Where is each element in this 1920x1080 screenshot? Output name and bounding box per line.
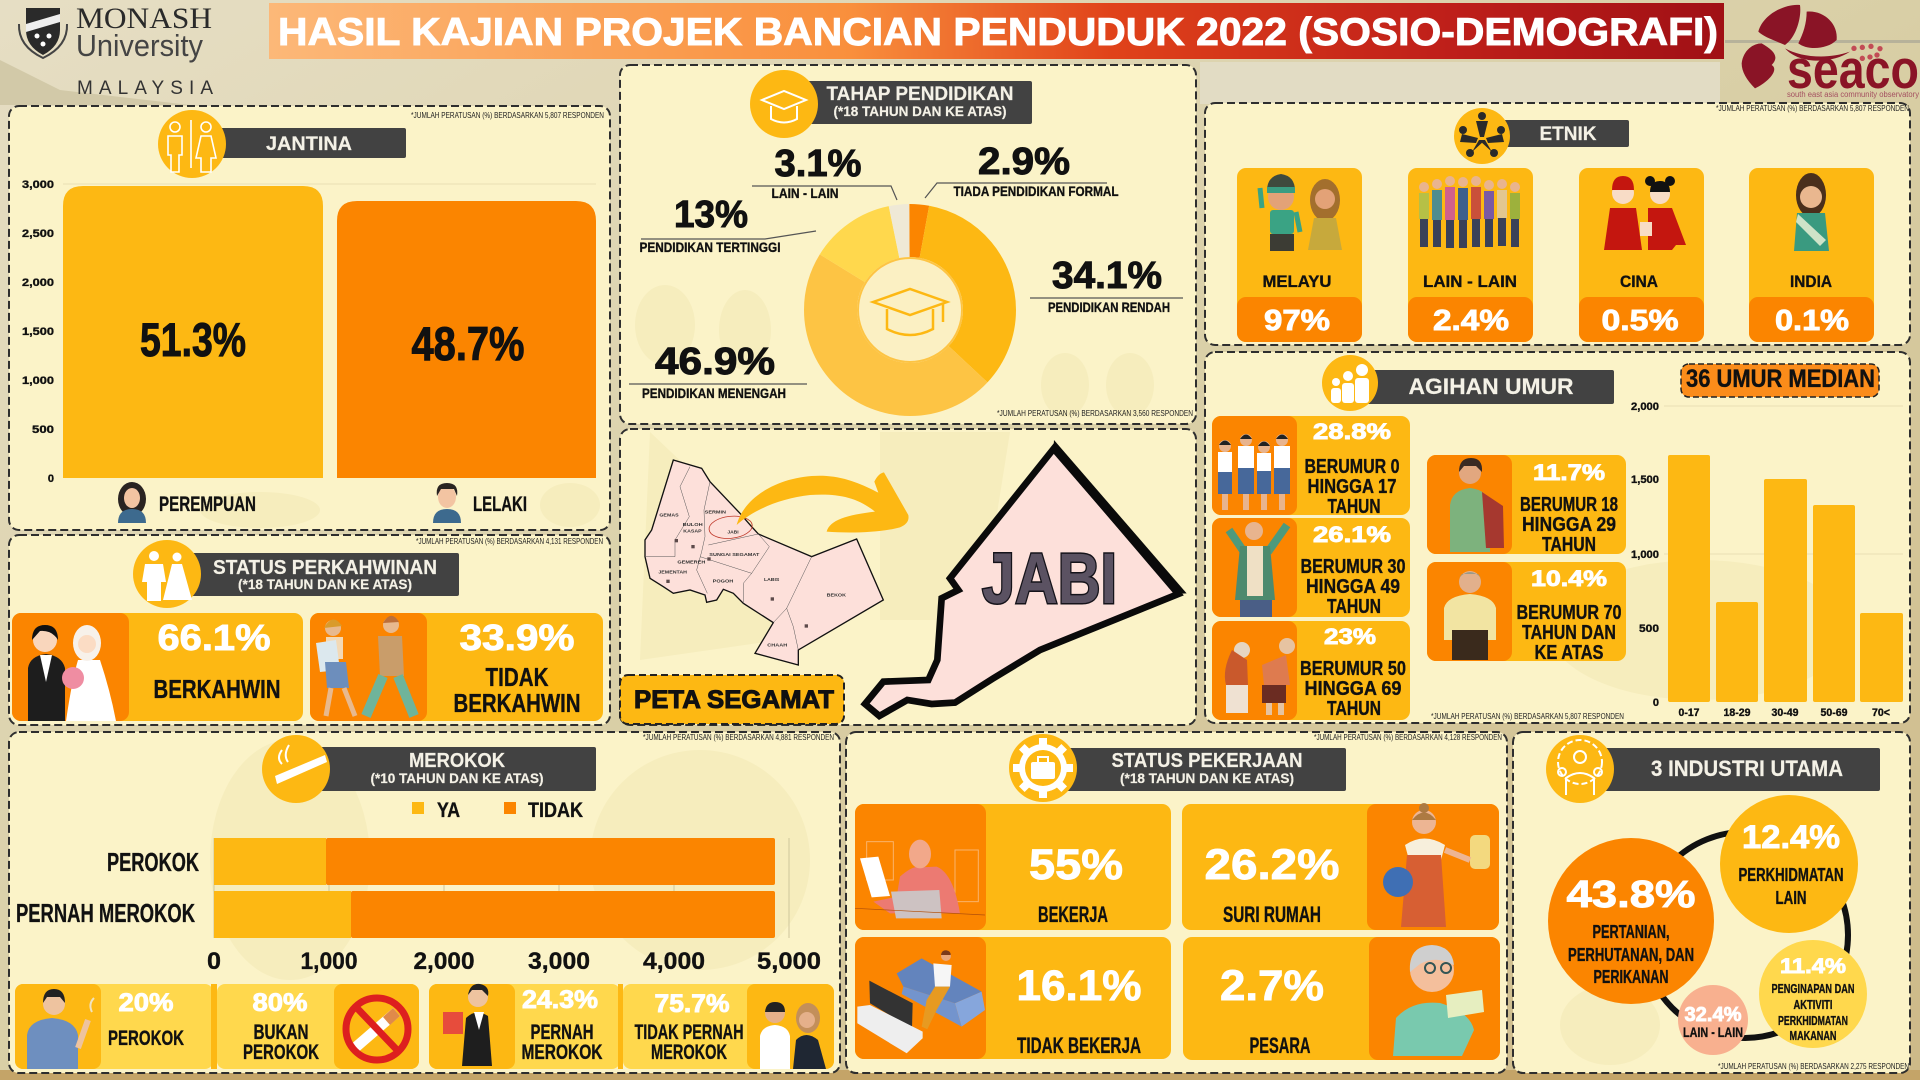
heading: agihan umur [1322, 355, 1614, 411]
cycle ring [1642, 832, 1848, 1038]
card: melayu [1237, 168, 1362, 342]
card: umur 30-49 [1212, 518, 1410, 618]
heading: tahap pendidikan: TAHAP PENDIDIKAN [826, 84, 1014, 105]
heading: etnik [1454, 108, 1629, 164]
legend: lelaki [433, 483, 527, 523]
text: 33.9% tidak berkahwin [454, 617, 580, 718]
card: perokok 20%: PEROKOK [108, 1027, 184, 1050]
callout: 46.9% pendidikan menengah: 46.9% [655, 341, 775, 383]
legend: merokok: YA [437, 799, 460, 822]
card: pernah merokok 24.3% [429, 984, 623, 1069]
card: umur 0-17: BERUMUR 0 [1304, 456, 1400, 478]
text: 66.1% berkahwin [154, 617, 280, 704]
bar chart: jantina: 2,500 [22, 228, 54, 240]
map: daerah segamat: LABIS [764, 577, 780, 583]
card: berkahwin [12, 613, 303, 721]
card: umur 30-49: HINGGA 49 [1306, 576, 1400, 598]
bar chart: merokok: 5,000 [757, 948, 821, 975]
heading: merokok: (*10 TAHUN DAN KE ATAS) [370, 770, 544, 786]
card: melayu: MELAYU [1262, 272, 1332, 291]
map: daerah segamat: POGOH [713, 578, 734, 584]
map: daerah segamat: KASAP [683, 528, 702, 534]
bar chart: merokok: 1,000 [300, 948, 358, 975]
bubble: 32.4% lain-lain [1678, 985, 1748, 1055]
bubble: 32.4% lain-lain: 32.4% [1684, 1004, 1742, 1026]
text: 66.1% berkahwin: BERKAHWIN [154, 674, 280, 704]
arrow: ke jabi [737, 472, 909, 532]
bubble: 11.4% penginapan: AKTIVITI [1794, 997, 1832, 1012]
map: daerah segamat: GEMEREH [677, 559, 706, 565]
source note: jantina: *JUMLAH PERATUSAN (%) BERDASARKAN 5,807 RESPONDEN [411, 111, 604, 120]
logo: Monash University Malaysia: MONASH [76, 2, 212, 35]
heading: status pekerjaan [1009, 734, 1346, 802]
card: pesara 2.7%: PESARA [1250, 1033, 1311, 1058]
card: pernah merokok 24.3%: PERNAH [530, 1021, 594, 1044]
callout: 3.1% lain-lain [752, 143, 897, 201]
map: jabi enlarged [865, 440, 1187, 716]
bar chart: agihan umur: 30-49 [1772, 707, 1798, 719]
panel: status perkahwinan [9, 535, 610, 725]
callout: 46.9% pendidikan menengah [629, 341, 807, 401]
bar chart: merokok: 4,000 [643, 948, 705, 975]
bar chart: merokok: 2,000 [414, 948, 474, 975]
text: 33.9% tidak berkahwin: TIDAK [486, 662, 549, 692]
card: umur 18-29: HINGGA 29 [1522, 514, 1616, 536]
bubble: 12.4% perkhidmatan lain: PERKHIDMATAN [1738, 865, 1844, 885]
card: umur 0-17 [1212, 416, 1410, 518]
panel: merokok [9, 732, 840, 1073]
panel: etnik [1205, 103, 1910, 345]
bubble: 11.4% penginapan: PENGINAPAN DAN [1772, 981, 1854, 996]
heading: status perkahwinan [133, 540, 459, 608]
card: bekerja 55%: BEKERJA [1038, 902, 1108, 927]
callout: 3.1% lain-lain: 3.1% [774, 143, 862, 185]
card: cina: CINA [1620, 272, 1658, 291]
card: umur 50-69 [1212, 621, 1410, 720]
panel: jantina [9, 106, 610, 530]
callout: 3.1% lain-lain: LAIN - LAIN [772, 185, 838, 201]
callout: umur median: 36 UMUR MEDIAN [1686, 365, 1875, 393]
bar chart: agihan umur: 2,000 [1631, 401, 1659, 413]
panel: agihan umur [1205, 352, 1910, 723]
callout: 2.9% tiada pendidikan formal [925, 141, 1119, 199]
bubble: 32.4% lain-lain: LAIN - LAIN [1683, 1024, 1743, 1040]
bar chart: jantina: 500 [32, 424, 54, 436]
heading: jantina: JANTINA [266, 134, 352, 155]
card: bukan perokok 80%: 80% [252, 989, 308, 1017]
callout: 13% pendidikan tertinggi [640, 194, 816, 255]
bubble: 11.4% penginapan [1759, 940, 1867, 1048]
heading: agihan umur: AGIHAN UMUR [1408, 374, 1574, 399]
map: jabi enlarged: JABI [982, 540, 1117, 619]
bar chart: jantina: 3,000 [22, 179, 54, 191]
card: lain-lain: 2.4% [1433, 305, 1509, 337]
card: pernah merokok 24.3%: MEROKOK [522, 1041, 602, 1064]
logo: Monash University Malaysia: MALAYSIA [77, 78, 213, 99]
label: peta segamat: PETA SEGAMAT [634, 686, 834, 714]
card: suri rumah 26.2%: 26.2% [1204, 841, 1340, 889]
card: umur 0-17: HINGGA 17 [1308, 476, 1396, 498]
card: bukan perokok 80%: PEROKOK [243, 1041, 319, 1064]
text: 33.9% tidak berkahwin: 33.9% [460, 617, 574, 658]
card: perokok 20% [15, 984, 217, 1069]
bar chart: agihan umur [1631, 401, 1903, 719]
callout: 46.9% pendidikan menengah: PENDIDIKAN MENENGAH [642, 385, 786, 401]
bar chart: merokok: PEROKOK [107, 847, 199, 877]
card: umur 70 ke atas: BERUMUR 70 [1516, 602, 1622, 624]
map: daerah segamat: SUNGAI SEGAMAT [709, 552, 759, 558]
map: daerah segamat: BULOH [683, 522, 703, 528]
card: umur 18-29: TAHUN [1542, 534, 1596, 556]
card: pesara 2.7% [1183, 937, 1500, 1060]
bubble: 43.8% pertanian [1548, 838, 1714, 1004]
heading: 3 industri utama: 3 INDUSTRI UTAMA [1651, 756, 1843, 781]
panel: status pekerjaan [846, 732, 1507, 1073]
card: umur 50-69: 23% [1324, 624, 1376, 649]
heading: etnik: ETNIK [1540, 124, 1597, 145]
bar chart: merokok: 0 [207, 948, 221, 975]
bar chart: merokok: 3,000 [528, 948, 590, 975]
bubble: 43.8% pertanian: PERIKANAN [1594, 967, 1668, 987]
text: 33.9% tidak berkahwin: BERKAHWIN [454, 688, 580, 718]
text: 66.1% berkahwin: 66.1% [158, 617, 270, 658]
callout: 2.9% tiada pendidikan formal: TIADA PENDIDIKAN FORMAL [954, 183, 1119, 199]
card: umur 50-69: TAHUN [1327, 698, 1381, 720]
bar chart: agihan umur: 50-69 [1820, 707, 1848, 719]
card: bukan perokok 80%: BUKAN [254, 1021, 308, 1044]
map: daerah segamat: JEMENTAH [658, 570, 687, 576]
map: daerah segamat: SERMIN [705, 509, 726, 515]
heading: tahap pendidikan [750, 70, 1032, 138]
card: umur 0-17: TAHUN [1328, 496, 1380, 518]
card: umur 70 ke atas [1427, 562, 1626, 664]
card: lain-lain: LAIN - LAIN [1423, 272, 1517, 291]
card: umur 18-29: BERUMUR 18 [1520, 494, 1618, 516]
logo: Monash University Malaysia: University [76, 28, 203, 63]
card: bekerja 55%: 55% [1029, 841, 1123, 889]
bar chart: agihan umur: 0 [1653, 697, 1659, 709]
card: umur 50-69: BERUMUR 50 [1300, 658, 1406, 680]
card: suri rumah 26.2%: SURI RUMAH [1223, 902, 1321, 927]
card: umur 70 ke atas: KE ATAS [1534, 642, 1604, 664]
bar chart: jantina: 0 [48, 473, 54, 485]
legend: merokok [412, 799, 583, 822]
map: daerah segamat: JABI [727, 529, 739, 535]
card: tidak bekerja 16.1%: 16.1% [1016, 962, 1142, 1010]
bar chart: agihan umur: 500 [1639, 623, 1659, 635]
card: india: INDIA [1790, 272, 1832, 291]
logo: SEACO [1742, 5, 1919, 100]
map: daerah segamat: GEMAS [659, 513, 679, 519]
source note: merokok: *JUMLAH PERATUSAN (%) BERDASARKAN 4,881 RESPONDEN [643, 733, 834, 742]
logo: Monash University Malaysia [19, 2, 213, 99]
legend: lelaki: LELAKI [473, 493, 527, 516]
bar chart: agihan umur: 1,500 [1631, 474, 1659, 486]
card: umur 18-29: 11.7% [1533, 460, 1605, 485]
card: tidak pernah merokok 75.7% [623, 984, 834, 1069]
bar chart: merokok: PERNAH MEROKOK [16, 898, 195, 928]
card: umur 70 ke atas: 10.4% [1531, 566, 1607, 591]
bubble: 12.4% perkhidmatan lain [1720, 795, 1858, 933]
card: umur 30-49: TAHUN [1327, 596, 1381, 618]
card: umur 18-29 [1427, 455, 1626, 556]
heading: status pekerjaan: STATUS PEKERJAAN [1112, 750, 1302, 772]
card: umur 70 ke atas: TAHUN DAN [1522, 622, 1616, 644]
legend: perempuan: PEREMPUAN [159, 493, 256, 516]
callout: 34.1% pendidikan rendah: PENDIDIKAN RENDAH [1048, 299, 1170, 315]
heading: tahap pendidikan: (*18 TAHUN DAN KE ATAS) [834, 104, 1006, 119]
bar chart: agihan umur: 70< [1872, 707, 1890, 719]
card: melayu: 97% [1264, 305, 1330, 337]
bar chart: jantina: 48.7% [412, 317, 524, 370]
card: pernah merokok 24.3%: 24.3% [522, 986, 598, 1014]
bubble: 11.4% penginapan: PERKHIDMATAN [1778, 1013, 1848, 1028]
card: tidak pernah merokok 75.7%: TIDAK PERNAH [634, 1021, 744, 1044]
bubble: 43.8% pertanian: PERHUTANAN, DAN [1568, 945, 1694, 965]
panel: 3 industri utama [1513, 732, 1910, 1073]
legend: perempuan [118, 482, 256, 523]
map: daerah segamat: BEKOK [827, 593, 846, 599]
legend: merokok: TIDAK [528, 799, 583, 822]
card: perokok 20%: 20% [118, 989, 174, 1017]
card: bekerja 55% [855, 804, 1171, 930]
card: cina: 0.5% [1602, 305, 1679, 337]
donut chart: pendidikan [830, 230, 990, 390]
callout: 34.1% pendidikan rendah [1030, 255, 1183, 315]
card: tidak pernah merokok 75.7%: 75.7% [654, 990, 730, 1018]
bubble: 43.8% pertanian: 43.8% [1566, 874, 1696, 916]
bubble: 11.4% penginapan: 11.4% [1780, 955, 1846, 978]
card: suri rumah 26.2% [1182, 803, 1499, 930]
card: lain-lain [1408, 168, 1533, 342]
panel: peta segamat [620, 429, 1196, 725]
title banner: HASIL KAJIAN PROJEK BANCIAN PENDUDUK 2022 (SOSIO-DEMOGRAFI) [278, 11, 1718, 54]
bubble: 11.4% penginapan: MAKANAN [1790, 1028, 1836, 1043]
bar chart: agihan umur: 0-17 [1678, 707, 1700, 719]
callout: 13% pendidikan tertinggi: PENDIDIKAN TERTINGGI [640, 239, 780, 255]
heading: merokok: MEROKOK [409, 750, 506, 772]
card: cina [1579, 168, 1704, 342]
bar chart: jantina: 51.3% [140, 313, 246, 366]
callout: 2.9% tiada pendidikan formal: 2.9% [978, 141, 1070, 183]
card: tidak bekerja 16.1% [855, 937, 1171, 1059]
bubble: 12.4% perkhidmatan lain: LAIN [1776, 888, 1806, 908]
bar chart: jantina: 1,000 [22, 375, 54, 387]
card: umur 30-49: BERUMUR 30 [1300, 556, 1406, 578]
source note: pekerjaan: *JUMLAH PERATUSAN (%) BERDASARKAN 4,128 RESPONDEN [1314, 733, 1502, 742]
heading: status perkahwinan: STATUS PERKAHWINAN [213, 557, 437, 579]
bar chart: merokok [16, 838, 821, 975]
heading: status pekerjaan: (*18 TAHUN DAN KE ATAS) [1120, 770, 1294, 786]
bar chart: agihan umur: 1,000 [1631, 549, 1659, 561]
card: umur 30-49: 26.1% [1313, 522, 1391, 547]
heading: status perkahwinan: (*18 TAHUN DAN KE ATAS) [238, 576, 412, 592]
callout: 13% pendidikan tertinggi: 13% [674, 194, 748, 236]
map: daerah segamat: CHAAH [767, 643, 788, 649]
heading: 3 industri utama [1546, 735, 1880, 803]
panel: tahap pendidikan [620, 65, 1196, 424]
bubble: 12.4% perkhidmatan lain: 12.4% [1742, 819, 1840, 855]
bar chart: jantina: 1,500 [22, 326, 54, 338]
card: umur 0-17: 28.8% [1313, 419, 1391, 444]
card: tidak bekerja 16.1%: TIDAK BEKERJA [1017, 1033, 1141, 1058]
bar chart: jantina [22, 179, 596, 485]
card: tidak pernah merokok 75.7%: MEROKOK [651, 1041, 727, 1064]
heading: merokok [262, 735, 596, 803]
card: bukan perokok 80% [217, 984, 419, 1069]
source note: pendidikan: *JUMLAH PERATUSAN (%) BERDASARKAN 3,560 RESPONDEN [997, 409, 1193, 418]
map: daerah segamat [645, 460, 883, 665]
heading: jantina [158, 110, 406, 178]
callout: 34.1% pendidikan rendah: 34.1% [1052, 255, 1162, 297]
label: peta segamat [620, 675, 844, 724]
card: umur 50-69: HINGGA 69 [1304, 678, 1402, 700]
card: india [1749, 168, 1874, 342]
card: pesara 2.7%: 2.7% [1220, 962, 1324, 1010]
bar chart: agihan umur: 18-29 [1724, 707, 1750, 719]
card: tidak berkahwin [310, 613, 603, 721]
bubble: 43.8% pertanian: PERTANIAN, [1592, 922, 1670, 942]
source note: umur: *JUMLAH PERATUSAN (%) BERDASARKAN 5,807 RESPONDEN [1431, 712, 1624, 721]
source note: perkahwinan: *JUMLAH PERATUSAN (%) BERDASARKAN 4,131 RESPONDEN [416, 537, 603, 546]
bar chart: jantina: 2,000 [22, 277, 54, 289]
card: india: 0.1% [1775, 305, 1849, 337]
